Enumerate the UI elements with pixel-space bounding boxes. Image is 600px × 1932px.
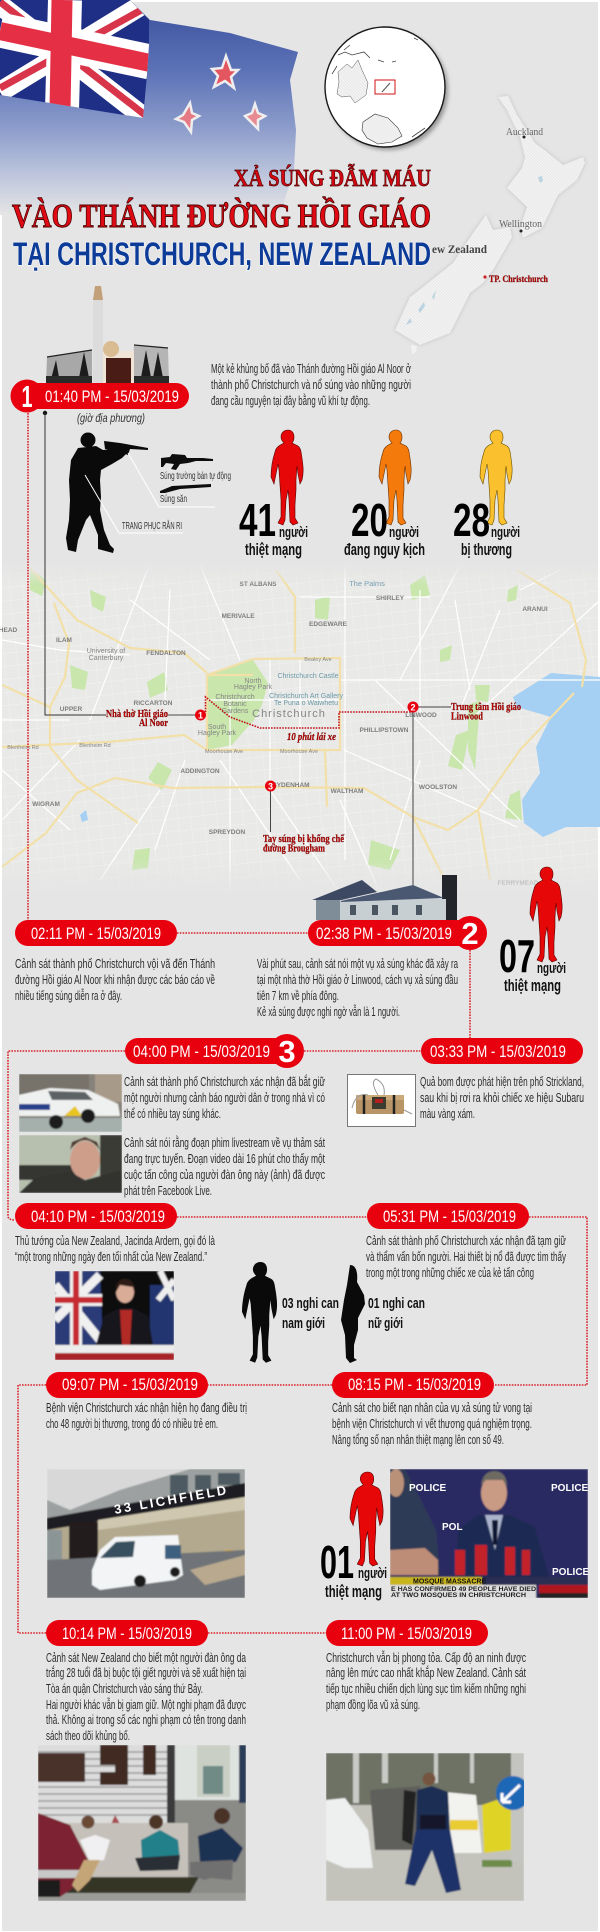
stat: 20 critical: đang nguy kịch <box>344 540 425 559</box>
police backdrop text: POLICE <box>552 1567 590 1578</box>
australia <box>337 60 368 103</box>
event pill 10:14 <box>46 1620 208 1646</box>
yellow figure <box>480 430 512 525</box>
event pill 03:33: 03:33 PM - 15/03/2019 <box>430 1043 566 1061</box>
event pill 02:11 <box>15 920 177 946</box>
photo: survivors on the curb <box>38 1745 246 1901</box>
stat: 28 injured <box>453 430 520 559</box>
stat: 41 killed: 41 <box>239 494 276 546</box>
map place labels: ADDINGTON <box>180 768 220 775</box>
police backdrop text: POL <box>442 1522 463 1533</box>
text 10:14: trắng 28 tuổi đã bị buộc tội giết người và sẽ xuất hiện tại <box>46 1665 246 1680</box>
text 11:00: phạm đồng lõa vũ xả súng. <box>326 1697 420 1712</box>
stat: 28 injured: 28 <box>453 494 490 546</box>
map place labels: North <box>244 678 262 685</box>
marker one: 1 <box>198 710 203 720</box>
locator rectangle <box>375 80 395 94</box>
black leader from event one to map <box>43 411 106 715</box>
text 02:38 <box>257 956 458 1019</box>
connector 02:38 to 03:33 <box>469 950 471 1038</box>
minaret <box>93 285 103 383</box>
suspects label male: nam giới <box>282 1315 325 1332</box>
stat: 07 killed at Linwood: thiệt mạng <box>504 976 561 995</box>
event pill 05:31 <box>367 1203 529 1229</box>
map place labels: Bealey Ave <box>304 657 332 663</box>
map place labels: Gardens <box>222 708 249 715</box>
officer <box>416 1786 450 1832</box>
arterial yellow roads <box>2 567 586 880</box>
text 09:07: Bệnh viện Christchurch xác nhận hiện họ đang điều trị <box>46 1400 247 1415</box>
map place labels: Blenheim Rd <box>7 745 39 751</box>
label Al Noor mosque <box>106 708 168 729</box>
map place labels: EDGEWARE <box>309 621 348 628</box>
rifle label: Súng trường bán tự động <box>160 470 231 482</box>
lakes <box>406 176 543 325</box>
text 04:10 <box>15 1233 215 1264</box>
event pill 02:11: 02:11 PM - 15/03/2019 <box>31 925 161 943</box>
connector 05:31 to 08:15 <box>494 1217 587 1385</box>
text 10:14 <box>46 1650 246 1743</box>
stat: 07 killed at Linwood: 07 <box>499 930 535 982</box>
star two <box>176 103 199 132</box>
map place labels: WOOLSTON <box>419 784 457 791</box>
police backdrop text: POLICE <box>409 1483 447 1494</box>
event pill 11:00 <box>326 1620 488 1646</box>
stat: 28 injured: người <box>491 524 520 541</box>
photo: prime minister Ardern <box>55 1271 174 1360</box>
route between the mosques <box>206 697 411 728</box>
map place labels: SYDENHAM <box>272 782 310 789</box>
stat: 41 killed <box>239 430 308 559</box>
new zealand label: ew Zealand <box>432 242 487 256</box>
stat: 20 critical <box>344 430 425 559</box>
map place labels: Christchurch Castle <box>277 673 339 680</box>
photo: police press conference <box>388 1469 590 1599</box>
event pill 03:33 <box>421 1038 583 1064</box>
connector 03:33 to 04:00 <box>304 1050 421 1052</box>
local time note: (giờ địa phương) <box>77 411 145 425</box>
map place labels: MERIVALE <box>221 613 255 620</box>
white roads <box>2 563 600 893</box>
map place labels: University of <box>87 648 125 655</box>
road sign <box>496 1776 530 1810</box>
text 04:00 first paragraph: một người nhưng cảnh báo người dân ở trong nhà vì có <box>124 1090 325 1105</box>
text 10:14: thả. Không ai trong số các nghi phạm có tên trong danh <box>46 1712 246 1727</box>
hospital sign: 33 LICHFIELD <box>113 1482 230 1517</box>
wellington label: Wellington <box>499 218 542 230</box>
marker one <box>195 710 206 720</box>
map place labels: RICCARTON <box>134 700 173 707</box>
event pill 01:40 <box>10 379 189 414</box>
marker two <box>408 702 418 712</box>
text 10:14: Cảnh sát New Zealand cho biết một người đàn ông da <box>46 1650 246 1665</box>
map place labels: PHILLIPSTOWN <box>360 727 409 734</box>
event pill 09:07: 09:07 PM - 15/03/2019 <box>62 1376 198 1394</box>
orange figure <box>379 430 411 525</box>
event pill 04:10: 04:10 PM - 15/03/2019 <box>31 1208 165 1226</box>
leader lines on map <box>168 707 451 885</box>
stat: 01 killed hospital death: người <box>358 1565 387 1582</box>
event pill 05:31: 05:31 PM - 15/03/2019 <box>383 1208 516 1226</box>
red dotted timeline left side <box>27 413 29 920</box>
title: VÀO THÁNH ĐƯỜNG HỒI GIÁO <box>12 196 431 235</box>
flag of New Zealand <box>0 0 298 215</box>
text 04:00 second paragraph: phát trên Facebook Live. <box>124 1183 212 1198</box>
event pill 09:07 <box>46 1372 208 1398</box>
map place labels: ARANUI <box>522 606 548 613</box>
text 02:11: nhiều tiếng súng diễn ra ở đây. <box>15 988 122 1003</box>
label Linwood: Trung tâm Hồi giáo <box>451 701 521 713</box>
text 02:38: Kẻ xả súng được nghi ngờ vẫn là 1 người. <box>257 1004 400 1019</box>
map place labels: WIGRAM <box>32 801 60 808</box>
text 08:15 <box>332 1400 532 1447</box>
icon: semi automatic rifle <box>161 454 213 470</box>
text 04:00 second paragraph <box>124 1135 325 1198</box>
text 02:11: đường Hồi giáo Al Noor khi nhận được các báo cáo về <box>15 972 215 987</box>
label Al Noor mosque: Al Noor <box>139 717 168 729</box>
stat: 20 critical: 20 <box>351 494 388 546</box>
text 05:31 <box>366 1233 566 1280</box>
stat: 28 injured: bị thương <box>461 540 512 559</box>
locator globe <box>325 27 448 150</box>
map place labels <box>0 579 548 887</box>
stat: 20 critical: người <box>389 524 419 541</box>
event pill 11:00: 11:00 PM - 15/03/2019 <box>341 1625 472 1643</box>
text 04:10: “một trong những ngày đen tối nhất của New Zealand.” <box>15 1249 207 1264</box>
connector 04:00 to 04:10 <box>8 1051 125 1220</box>
label Brougham street: đường Brougham <box>263 842 325 854</box>
shotgun label: Súng săn <box>160 493 187 505</box>
text 11:00 <box>326 1650 526 1712</box>
event pill 01:40: 1 <box>22 379 32 414</box>
leader lines from shooter <box>85 453 215 533</box>
map place labels: The Palms <box>349 579 385 588</box>
title: TẠI CHRISTCHURCH, NEW ZEALAND <box>13 236 431 272</box>
event pill 04:00 with number 3 <box>125 1034 304 1069</box>
event pill 02:38 with number 2: 02:38 PM - 15/03/2019 <box>316 925 452 943</box>
shooter silhouette <box>66 432 148 553</box>
connector 10:14 to 11:00 <box>208 1632 326 1634</box>
title: XẢ SÚNG ĐẪM MÁU <box>234 164 431 192</box>
photo: armed police officer <box>326 1753 530 1901</box>
label Al Noor mosque: Nhà thờ Hồi giáo <box>106 708 168 720</box>
stat: 41 killed: người <box>279 524 308 541</box>
label Brougham street <box>263 833 345 854</box>
text 04:00 first paragraph <box>124 1074 325 1121</box>
female suspect silhouette <box>341 1265 365 1363</box>
suspects label female: nữ giới <box>368 1315 403 1332</box>
connector 02:11 to 02:38 <box>177 932 308 934</box>
text 03:33: màu vàng xám. <box>420 1106 475 1121</box>
event pill 08:15 <box>332 1372 494 1398</box>
man in teal shirt <box>141 1830 180 1860</box>
text 02:38: tại một nhà thờ Hồi giáo ở Linwood, cách vụ xả súng đầu <box>257 972 458 987</box>
police backdrop text: E HAS CONFIRMED 49 PEOPLE HAVE DIED <box>391 1586 536 1593</box>
text 04:00 second paragraph: đang trực tuyến. Đoạn video dài 16 phút cho thấy một <box>124 1151 325 1166</box>
map place labels: Christchurch <box>252 708 326 720</box>
map place labels: Christchurch <box>215 694 255 701</box>
text 09:07: cho 48 người bị thương, trong đó có nhiều trẻ em. <box>46 1416 218 1431</box>
text 04:00 second paragraph: Cảnh sát nói rằng đoạn phim livestream về vụ thảm sát <box>124 1135 325 1150</box>
stat: 07 killed at Linwood <box>499 867 566 995</box>
event pill 04:00 with number 3: 04:00 PM - 15/03/2019 <box>133 1043 270 1061</box>
title <box>12 164 431 272</box>
map place labels: Christchurch Art Gallery <box>269 693 343 700</box>
photo: gunman livestream <box>19 1135 122 1193</box>
suspects label male: 03 nghi can <box>282 1295 339 1312</box>
man in white shirt <box>80 1835 110 1862</box>
stat: 01 killed hospital death: thiệt mạng <box>325 1582 382 1601</box>
map place labels: SHIRLEY <box>376 595 405 602</box>
intro text: đang cầu nguyện tại đây bằng vũ khí tự động. <box>211 393 370 408</box>
connector 08:15 to 09:07 <box>208 1384 332 1386</box>
event pill 08:15: 08:15 PM - 15/03/2019 <box>348 1376 481 1394</box>
red figure <box>271 430 303 525</box>
text 02:38: tiên 7 km về phía đông. <box>257 988 339 1003</box>
map of New Zealand <box>395 96 585 354</box>
stat: 01 killed hospital death: 01 <box>320 1536 354 1588</box>
text 02:11 <box>15 956 215 1003</box>
red figure <box>530 867 562 962</box>
police backdrop text: POLICE <box>551 1483 589 1494</box>
map place labels: FENDALTON <box>146 650 186 657</box>
map place labels: Te Puna o Waiwhetu <box>274 700 338 707</box>
map place labels: LINWOOD <box>405 712 437 719</box>
map place labels: Moorhouse Ave <box>280 749 318 755</box>
photo: bomb <box>348 1074 416 1126</box>
text 09:07 <box>46 1400 247 1431</box>
event pill 04:00 with number 3: 3 <box>278 1034 296 1069</box>
marker three: 3 <box>268 782 273 792</box>
auckland label: Auckland <box>506 126 543 138</box>
police backdrop text: AT TWO MOSQUES IN CHRISTCHURCH <box>391 1592 526 1599</box>
police backdrop text <box>391 1483 590 1599</box>
text 04:00 first paragraph: thể có nhiều tay súng khác. <box>124 1106 221 1121</box>
event pill 04:10 <box>15 1203 177 1229</box>
label driving time: 10 phút lái xe <box>287 731 336 743</box>
event pill 02:38 with number 2: 2 <box>461 916 479 951</box>
police backdrop text: MOSQUE MASSACRE <box>413 1578 486 1586</box>
map place labels: Blenheim Rd <box>79 743 111 749</box>
icon: shotgun <box>160 484 211 493</box>
red figure <box>350 1472 383 1566</box>
suspects label male <box>282 1295 339 1332</box>
house photo Linwood <box>312 875 457 920</box>
mosque photo <box>46 285 169 383</box>
intro text <box>211 361 411 408</box>
map place labels: UPPER <box>60 706 82 713</box>
suspects label female <box>368 1295 425 1332</box>
christchurch label: TP. Christchurch <box>489 275 549 285</box>
map place labels: WALTHAM <box>331 788 363 795</box>
photo: hospital at 33 Lichfield <box>47 1469 245 1598</box>
north island <box>498 96 585 238</box>
map place labels: Canterbury <box>89 655 124 662</box>
text 10:14: Tòa án quận Christchurch vào sáng thứ Bảy. <box>46 1681 203 1696</box>
map place labels: Hagley Park <box>198 730 237 737</box>
map place labels: ILAM <box>56 637 72 644</box>
map place labels: SPREYDON <box>209 829 246 836</box>
text 04:10: Thủ tướng của New Zealand, Jacinda Ardern, gọi đó là <box>15 1233 215 1248</box>
text 04:00 second paragraph: cuộc tấn công của người đàn ông này (ảnh) đã được <box>124 1167 325 1182</box>
text 02:11: Cảnh sát thành phố Christchurch vội vã đến Thánh <box>15 956 215 971</box>
label Brougham street: Tay súng bị khống chế <box>263 833 345 845</box>
text 04:00 first paragraph: Cảnh sát thành phố Christchurch xác nhận đã bắt giữ <box>124 1074 325 1089</box>
antarctica <box>362 114 402 144</box>
text 03:33 <box>420 1074 584 1121</box>
south island <box>395 215 512 345</box>
map place labels: Hagley Park <box>234 684 273 691</box>
map place labels: Botanic <box>223 701 247 708</box>
man in navy shirt <box>198 1828 243 1862</box>
text 02:38: Vài phút sau, cảnh sát nói một vụ xả súng khác đã xảy ra <box>257 956 458 971</box>
water <box>513 673 600 837</box>
label Linwood <box>451 701 521 722</box>
marker two: 2 <box>410 702 416 712</box>
parks <box>30 568 522 870</box>
photo: police car <box>19 1074 122 1132</box>
text 10:14: Hai người khác vẫn bị giam giữ. Một nghi phạm đã được <box>46 1697 246 1712</box>
label Linwood: Linwood <box>451 710 483 722</box>
event pill 10:14: 10:14 PM - 15/03/2019 <box>62 1625 192 1643</box>
male suspects silhouette <box>242 1262 277 1363</box>
stewart island <box>411 345 417 354</box>
suspects label female: 01 nghi can <box>368 1295 425 1312</box>
map place labels: FERRYMEAD <box>498 880 539 887</box>
map place labels: South <box>208 724 226 731</box>
camouflage label: TRANG PHỤC RẰN RI <box>122 519 182 532</box>
stat: 01 killed hospital death <box>320 1472 387 1601</box>
star three <box>245 104 265 129</box>
text 10:14: sách theo dõi khủng bố. <box>46 1728 130 1743</box>
intro text: thành phố Christchurch và nổ súng vào những người <box>211 377 411 392</box>
connector 09:07 to 10:14 <box>18 1385 46 1633</box>
map place labels: ST ALBANS <box>240 581 277 588</box>
event pill 01:40: 01:40 PM - 15/03/2019 <box>45 388 179 406</box>
street map of Christchurch <box>0 563 600 894</box>
stat: 07 killed at Linwood: người <box>537 960 566 977</box>
marker three <box>265 780 276 792</box>
star one <box>212 56 238 88</box>
connector 04:10 to 05:31 <box>177 1216 367 1218</box>
map place labels: Moorhouse Ave <box>205 749 243 755</box>
intro text: Một kẻ khủng bố đã vào Thánh đường Hồi giáo Al Noor ở <box>211 361 411 376</box>
event pill 02:38 with number 2 <box>308 916 487 951</box>
stat: 41 killed: thiệt mạng <box>245 540 302 559</box>
